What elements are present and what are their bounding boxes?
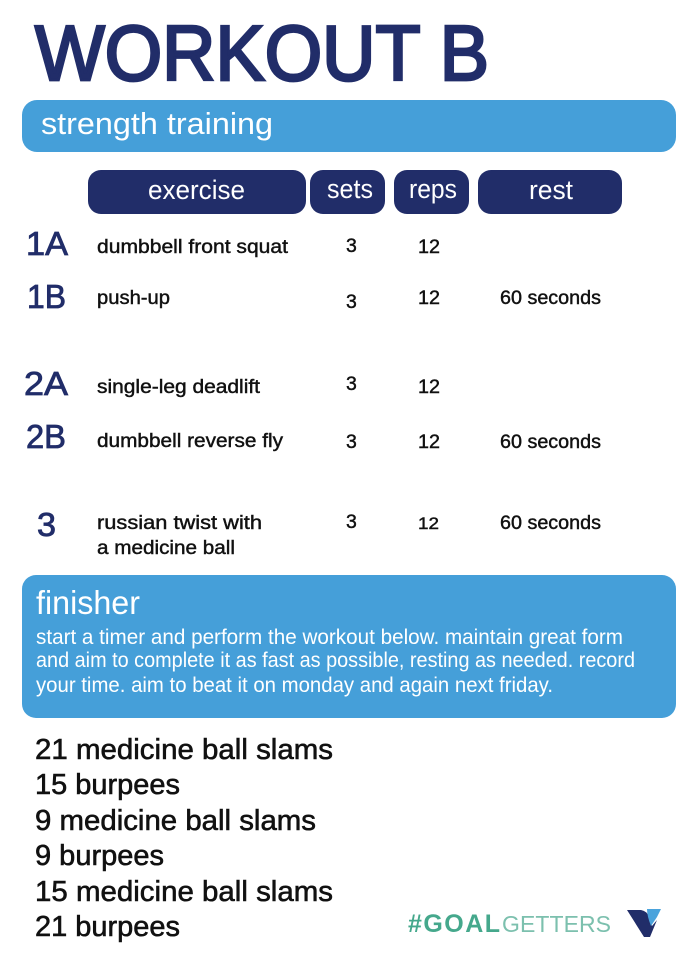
table header: reps: reps	[409, 174, 457, 204]
finisher description: start a timer and perform the workout below. maintain great form	[36, 626, 623, 649]
row 2A: 2A	[24, 365, 68, 402]
row 1A: 3	[346, 235, 357, 257]
row 3: 60 seconds	[500, 512, 601, 534]
row 1B	[27, 278, 601, 315]
panel: strength training banner	[22, 100, 676, 152]
row 2A	[24, 365, 440, 402]
icon: V logo	[627, 909, 661, 937]
finisher workout list: 15 medicine ball slams	[35, 876, 333, 908]
finisher workout list: 15 burpees	[35, 769, 180, 801]
hashtag	[408, 910, 611, 938]
table header: sets: sets	[327, 174, 373, 204]
row 2A: 12	[418, 376, 440, 398]
panel: strength training banner: strength training	[41, 106, 273, 141]
finisher description	[36, 626, 635, 697]
finisher workout list: 9 burpees	[35, 840, 164, 872]
table header: exercise: exercise	[148, 175, 245, 205]
row 2B: dumbbell reverse fly	[97, 430, 283, 452]
row 2A: 3	[346, 373, 357, 395]
row 1B: 60 seconds	[500, 287, 601, 309]
row 1A: dumbbell front squat	[97, 236, 289, 258]
row 2B: 2B	[26, 418, 66, 455]
row 3	[37, 506, 601, 559]
title: WORKOUT B	[35, 9, 489, 97]
finisher workout list: 9 medicine ball slams	[35, 805, 316, 837]
row 2B: 12	[418, 431, 440, 453]
row 2B: 3	[346, 431, 357, 453]
row 1A: 1A	[26, 225, 68, 262]
table header: exercise	[88, 170, 306, 214]
row 3: russian twist with	[97, 512, 262, 534]
row 1B: 12	[418, 287, 440, 309]
table header: rest: rest	[529, 175, 573, 205]
row 3: 3	[37, 506, 56, 543]
row 1B: 3	[346, 291, 357, 313]
finisher workout list: 21 medicine ball slams	[35, 734, 333, 766]
row 1A: 12	[418, 236, 440, 258]
finisher workout list	[35, 734, 333, 943]
row 2B: 60 seconds	[500, 431, 601, 453]
table header: sets	[310, 170, 385, 214]
row 2B	[26, 418, 601, 455]
row 3: 12	[418, 514, 439, 533]
hashtag: #GOAL	[408, 910, 500, 938]
finisher heading: finisher	[36, 584, 140, 621]
hashtag: GETTERS	[502, 911, 611, 937]
row 3: 3	[346, 511, 357, 533]
finisher description: your time. aim to beat it on monday and again next friday.	[36, 674, 553, 697]
table header: rest	[478, 170, 622, 214]
row 1B: push-up	[97, 287, 170, 309]
finisher description: and aim to complete it as fast as possible, resting as needed. record	[36, 649, 635, 672]
panel: finisher	[22, 575, 676, 718]
table header: reps	[394, 170, 469, 214]
row 1A	[26, 225, 440, 262]
row 3: a medicine ball	[97, 537, 235, 559]
row 1B: 1B	[27, 278, 66, 315]
row 2A: single-leg deadlift	[97, 376, 261, 398]
finisher workout list: 21 burpees	[35, 911, 180, 943]
